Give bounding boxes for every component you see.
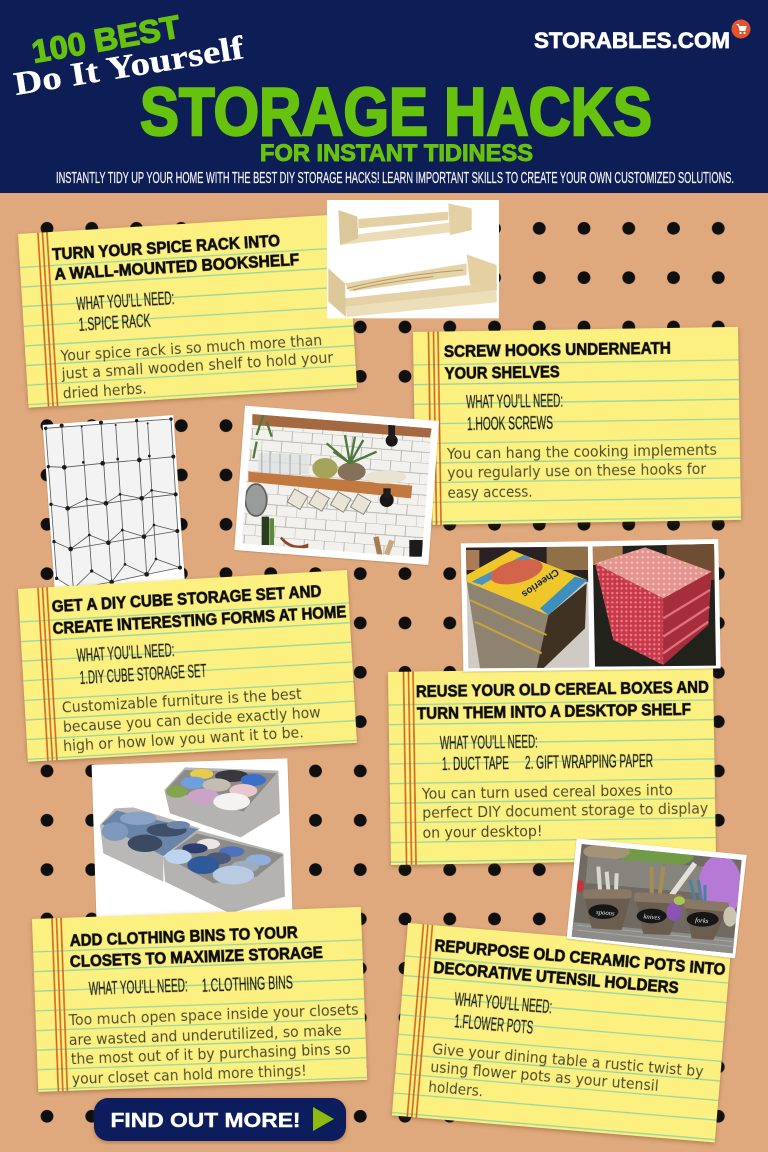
- photo: cereal box shelves: Cheerios: [519, 566, 561, 600]
- heading: [416, 677, 709, 723]
- heading: CREATE INTERESTING FORMS AT HOME: [52, 602, 347, 638]
- heading: REUSE YOUR OLD CEREAL BOXES AND: [416, 677, 709, 701]
- description: high or how low you want it to be.: [63, 723, 304, 755]
- top bin: [164, 767, 280, 837]
- description: are wasted and underutilized, so make: [69, 1021, 342, 1049]
- heading: [432, 936, 726, 1001]
- materials list: WHAT YOU'LL NEED:: [454, 988, 553, 1017]
- materials list: WHAT YOU'LL NEED:: [88, 974, 188, 999]
- panel: cereal box card: [388, 667, 716, 865]
- materials list: WHAT YOU'LL NEED:: [76, 287, 175, 314]
- heading: [69, 922, 323, 971]
- panel: spice rack card: [18, 214, 357, 408]
- materials list: 1.CLOTHING BINS: [201, 971, 293, 996]
- heading: GET A DIY CUBE STORAGE SET AND: [51, 582, 322, 616]
- heading: TURN THEM INTO A DESKTOP SHELF: [417, 700, 691, 723]
- badge: do it yourself: Do It Yourself: [12, 30, 247, 103]
- photo: wooden spice racks: [327, 200, 499, 318]
- left bin: [100, 807, 200, 882]
- description: perfect DIY document storage to display: [422, 799, 708, 822]
- heading: SCREW HOOKS UNDERNEATH: [444, 338, 671, 361]
- description: you regularly use on these hooks for: [447, 460, 707, 482]
- heading: DECORATIVE UTENSIL HOLDERS: [433, 958, 679, 998]
- badge: 100 best: 100 BEST: [29, 8, 183, 70]
- description: Customizable furniture is the best: [61, 685, 302, 717]
- right bin: [163, 830, 285, 913]
- materials list: WHAT YOU'LL NEED:: [440, 730, 538, 753]
- photo: wire cube storage: [43, 415, 185, 593]
- heading: [52, 230, 300, 284]
- description: [60, 684, 322, 755]
- description: Give your dining table a rustic twist by: [432, 1040, 704, 1081]
- materials list: [76, 287, 176, 335]
- heading: [51, 580, 347, 638]
- description: on your desktop!: [422, 822, 543, 842]
- heading: ADD CLOTHING BINS TO YOUR: [69, 923, 298, 950]
- logo: STORABLES.COM: [534, 28, 730, 53]
- photo: kitchen shelves with hooks: [233, 406, 440, 565]
- photo: clothing bins: [92, 758, 293, 925]
- heading: REPURPOSE OLD CERAMIC POTS INTO: [434, 936, 726, 979]
- description: holders.: [428, 1078, 484, 1101]
- materials list: [440, 729, 653, 774]
- photo: utensil pots: knives: [643, 913, 661, 922]
- materials list: [452, 988, 553, 1039]
- photo: utensil pots: [567, 838, 747, 958]
- description: [421, 780, 709, 842]
- description: your closet can hold more things!: [72, 1061, 307, 1088]
- description: just a small wooden shelf to hold your: [60, 348, 334, 383]
- materials list: [76, 637, 207, 688]
- materials list: 1.SPICE RACK: [78, 310, 152, 335]
- description: You can hang the cooking implements: [446, 441, 717, 463]
- materials list: [466, 390, 564, 434]
- description: [428, 1040, 704, 1119]
- panel: screw hooks card: [413, 327, 741, 525]
- icon: cart: [732, 20, 750, 38]
- description: [59, 330, 336, 403]
- materials list: WHAT YOU'LL NEED:: [76, 639, 175, 666]
- photo: cereal box shelves: [461, 539, 721, 672]
- materials list: 1.DIY CUBE STORAGE SET: [79, 660, 207, 688]
- description: Your spice rack is so much more than: [59, 331, 323, 365]
- materials list: 2. GIFT WRAPPING PAPER: [525, 750, 653, 773]
- description: Too much open space inside your closets: [67, 1000, 359, 1029]
- description: [446, 441, 718, 502]
- materials list: WHAT YOU'LL NEED:: [466, 390, 563, 412]
- description: the most out of it by purchasing bins so: [71, 1040, 351, 1068]
- button: find out more: FIND OUT MORE!: [110, 1110, 300, 1132]
- description: easy access.: [447, 483, 533, 502]
- materials list: 1.HOOK SCREWS: [467, 412, 553, 434]
- heading: YOUR SHELVES: [445, 362, 560, 383]
- heading: [444, 338, 671, 383]
- materials list: 1. DUCT TAPE: [442, 752, 509, 774]
- description: You can turn used cereal boxes into: [421, 781, 673, 803]
- panel: cube storage card: [18, 570, 357, 762]
- photo: utensil pots: forks: [695, 917, 709, 925]
- description: because you can decide exactly how: [63, 703, 321, 736]
- photo: utensil pots: spoons: [596, 909, 615, 918]
- icon: arrow: [313, 1107, 334, 1131]
- description: [67, 1000, 361, 1088]
- heading: A WALL-MOUNTED BOOKSHELF: [54, 250, 300, 284]
- subtitle: FOR INSTANT TIDINESS: [260, 140, 533, 167]
- button: find out more: [94, 1098, 346, 1141]
- panel: clothing bins card: [32, 907, 367, 1092]
- materials list: 1.FLOWER POTS: [454, 1010, 534, 1038]
- heading: CLOSETS TO MAXIMIZE STORAGE: [70, 943, 323, 971]
- heading: TURN YOUR SPICE RACK INTO: [52, 231, 280, 264]
- description: using flower pots as your utensil: [430, 1058, 659, 1095]
- description: dried herbs.: [62, 379, 147, 403]
- panel: ceramic pots card: [392, 923, 731, 1142]
- header banner: [0, 0, 768, 193]
- title: STORAGE HACKS: [140, 74, 652, 150]
- logo: [534, 20, 750, 53]
